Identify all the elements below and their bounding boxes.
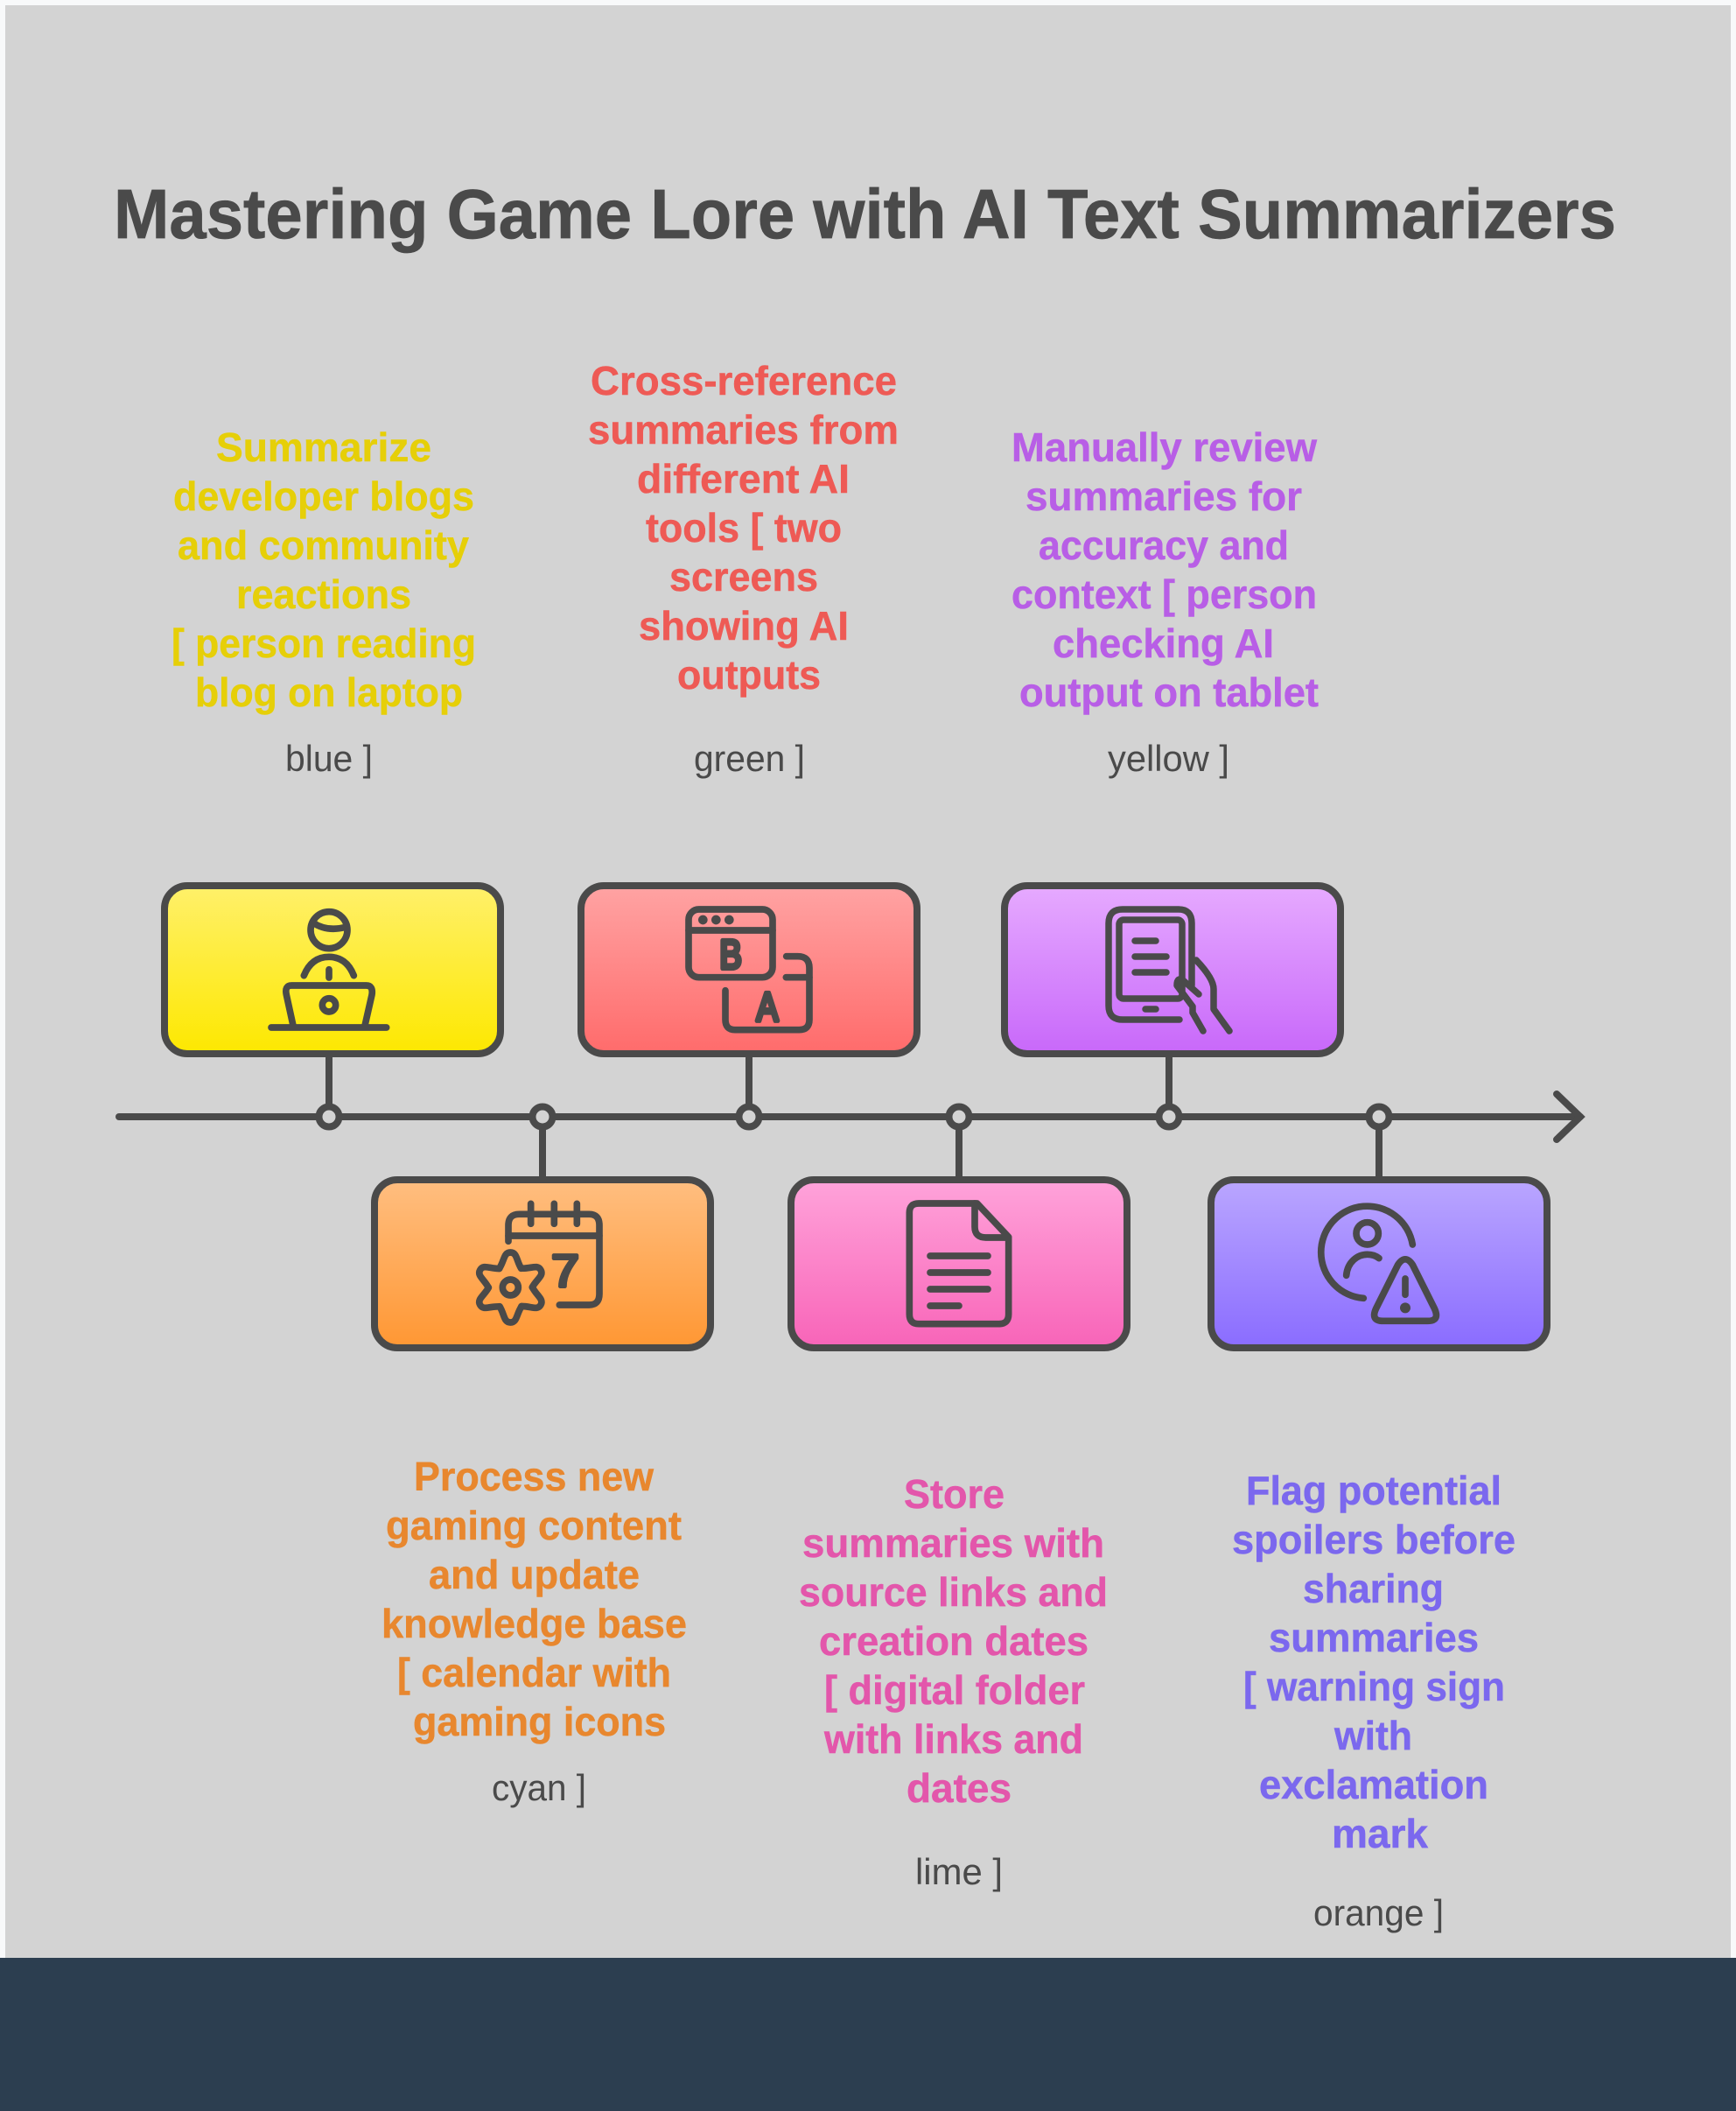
step 5 text: summaries for (1026, 473, 1302, 519)
icon: person at laptop (271, 912, 387, 1027)
step 6 text: mark (1332, 1811, 1428, 1856)
step 6 card (1211, 1180, 1547, 1348)
step 5 text: yellow ] (1108, 738, 1229, 779)
step 1 text: Summarize (216, 424, 431, 470)
step 2 text: and update (429, 1552, 640, 1597)
step 1 card (164, 886, 500, 1054)
step 5 node (1158, 1106, 1180, 1127)
step 6 text: spoilers before (1232, 1517, 1516, 1562)
step 3 text: screens (669, 554, 818, 600)
step 3 text (588, 358, 899, 779)
step 4 text: summaries with (802, 1520, 1104, 1566)
step 3 text: summaries from (588, 407, 899, 452)
step 5 text (1012, 424, 1319, 779)
step 3 node (738, 1106, 760, 1127)
step 5 text: output on tablet (1019, 670, 1319, 715)
step 3 text: tools [ two (646, 505, 842, 551)
step 1 text: and community (178, 522, 469, 568)
step 3 connector (746, 1054, 752, 1117)
icon: hand holding tablet (1109, 909, 1229, 1031)
step 6 text: with (1334, 1713, 1412, 1758)
step 2 text: [ calendar with (397, 1650, 671, 1695)
step 6 text: sharing (1303, 1566, 1444, 1611)
step 4 text: with links and (823, 1716, 1083, 1762)
step 4 text: creation dates (819, 1618, 1088, 1664)
icon: two screens A and B: A (757, 984, 779, 1029)
icon: person with warning triangle (1321, 1206, 1436, 1321)
step 3 text: Cross-reference (591, 358, 897, 403)
step 4 text: source links and (799, 1569, 1108, 1615)
step 1 text: blog on laptop (195, 670, 463, 715)
step 4 connector (956, 1117, 962, 1180)
step 5: manual review (1004, 424, 1340, 1127)
step 3 text: green ] (694, 738, 805, 779)
step 6 text (1232, 1468, 1516, 1933)
step 5 text: context [ person (1012, 572, 1317, 617)
step 2 text: Process new (414, 1454, 654, 1499)
timeline axis with arrow (119, 1094, 1580, 1140)
step 2: process new content (374, 1106, 710, 1808)
step 4: store summaries (791, 1106, 1127, 1892)
title: Mastering Game Lore with AI Text Summarizers (114, 175, 1616, 253)
step 5 card (1004, 886, 1340, 1054)
step 6 text: orange ] (1313, 1892, 1444, 1933)
step 2 text: knowledge base (382, 1601, 687, 1646)
step 3: cross-reference tools (581, 358, 917, 1127)
step 6 connector (1376, 1117, 1382, 1180)
step 2 text (382, 1454, 687, 1808)
step 2 text: gaming content (386, 1503, 682, 1548)
step 6 text: summaries (1269, 1615, 1479, 1660)
step 3 text: different AI (637, 456, 850, 501)
step 6 node (1368, 1106, 1390, 1127)
step 1: summarize blogs (164, 424, 500, 1127)
step 1 text: developer blogs (173, 473, 474, 519)
step 3 text: outputs (677, 652, 821, 698)
step 5 connector (1166, 1054, 1172, 1117)
step 6 text: Flag potential (1246, 1468, 1502, 1513)
step 4 text (799, 1471, 1108, 1892)
step 3 card (581, 886, 917, 1054)
step 2 card (374, 1180, 710, 1348)
icon: calendar with gear (474, 1203, 599, 1322)
step 1 node (318, 1106, 340, 1127)
step 2 node (532, 1106, 553, 1127)
icon: calendar with gear: 7 (551, 1245, 579, 1296)
icon: two screens A and B (689, 909, 809, 1030)
step 2 text: gaming icons (413, 1699, 666, 1744)
step 4 text: Store (904, 1471, 1004, 1517)
step 1 text (172, 424, 476, 779)
step 5 text: checking AI (1053, 621, 1274, 666)
icon: document (909, 1203, 1009, 1324)
footer band (0, 1958, 1736, 2111)
step 4 text: dates (906, 1765, 1012, 1811)
step 6 text: exclamation (1259, 1762, 1488, 1807)
step 5 text: Manually review (1012, 424, 1317, 470)
icon: two screens A and B: B (719, 931, 742, 977)
step 4 card (791, 1180, 1127, 1348)
step 1 text: blue ] (285, 738, 373, 779)
step 5 text: accuracy and (1039, 522, 1289, 568)
step 6: flag spoilers (1211, 1106, 1547, 1933)
step 4 text: [ digital folder (824, 1667, 1085, 1713)
step 1 text: [ person reading (172, 621, 476, 666)
step 2 text: cyan ] (492, 1767, 586, 1808)
step 1 text: reactions (236, 572, 411, 617)
step 6 text: [ warning sign (1243, 1664, 1505, 1709)
step 1 connector (326, 1054, 332, 1117)
step 2 connector (539, 1117, 546, 1180)
step 4 node (948, 1106, 970, 1127)
step 4 text: lime ] (915, 1851, 1003, 1892)
step 3 text: showing AI (639, 603, 849, 649)
